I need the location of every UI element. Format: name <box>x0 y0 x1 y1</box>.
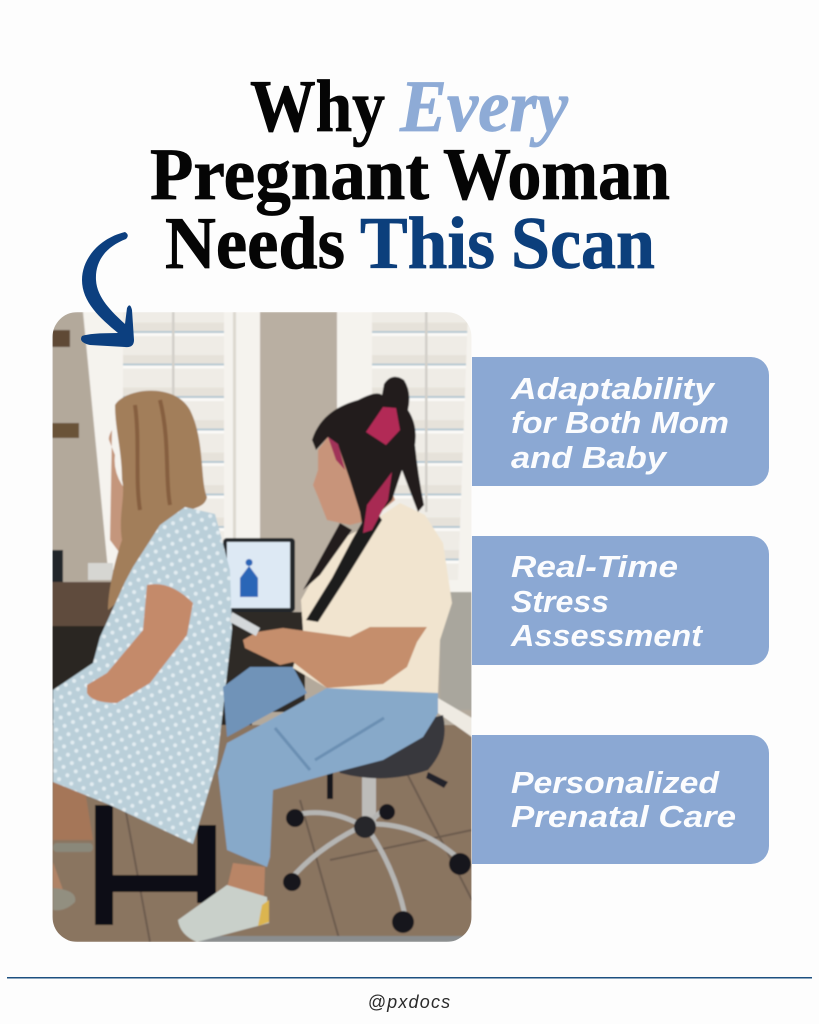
title line 1: Why <box>250 66 385 148</box>
pregnant woman's hair and face <box>108 391 207 610</box>
therapist's stool <box>283 715 471 933</box>
pregnant woman's arm <box>87 584 193 703</box>
panel: stress assessment card <box>472 536 769 665</box>
title line 2 <box>150 134 670 216</box>
card text <box>510 371 729 475</box>
therapist's shoe <box>178 863 269 942</box>
card text: Adaptability <box>510 371 716 406</box>
card text <box>511 765 736 834</box>
title line 3 <box>165 203 655 285</box>
therapist's jeans <box>218 667 438 867</box>
title line 3: Needs <box>165 203 345 285</box>
therapist's arm and hands <box>243 627 427 688</box>
pregnant woman's legs and stool <box>53 770 216 925</box>
therapist's hair and face <box>303 377 424 622</box>
card text: Personalized <box>511 765 720 800</box>
title <box>150 66 670 285</box>
title line 1: Every <box>399 66 569 148</box>
title line 3: Scan <box>511 203 655 285</box>
card text: Real-Time <box>511 549 678 584</box>
title line 3: This <box>360 203 495 285</box>
card text: Assessment <box>510 618 704 653</box>
handheld scanner <box>230 612 260 636</box>
title line 1 <box>250 66 569 148</box>
card text <box>510 549 704 653</box>
therapist's shirt <box>293 503 452 693</box>
card text: for Both Mom <box>511 405 729 440</box>
panel: prenatal care card <box>472 735 769 864</box>
card text: Stress <box>511 584 609 619</box>
card text: and Baby <box>511 440 668 475</box>
photo: therapist scanning a pregnant woman's back <box>52 312 472 942</box>
title line 2: Woman <box>443 134 670 216</box>
card text: Prenatal Care <box>511 799 736 834</box>
tablet showing spine scan <box>223 538 295 612</box>
title line 2: Pregnant <box>150 134 429 216</box>
arrow pointing at photo <box>81 232 134 347</box>
room background <box>52 312 472 942</box>
footer handle: @pxdocs <box>368 992 451 1012</box>
panel: adaptability card <box>472 357 769 486</box>
pregnant woman's dress <box>53 507 232 844</box>
